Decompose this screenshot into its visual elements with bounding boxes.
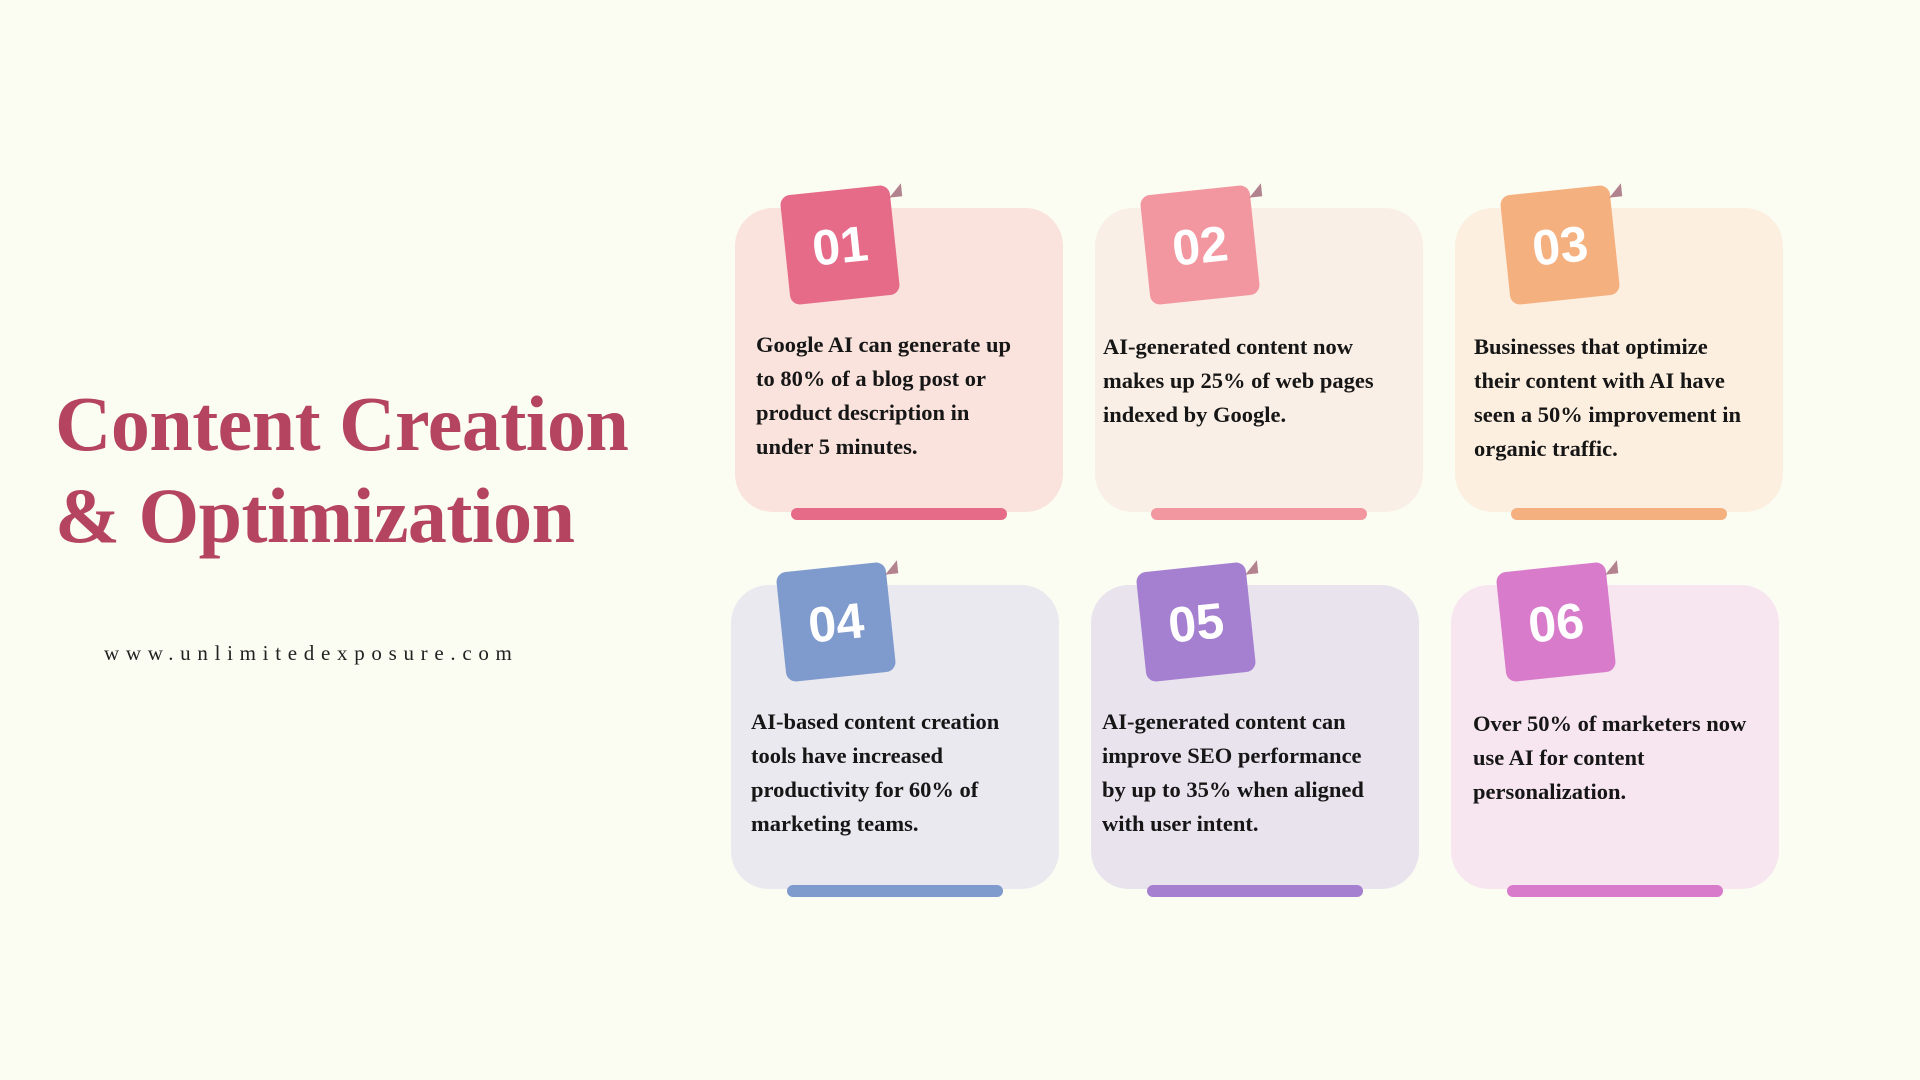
bar 01 xyxy=(791,508,1007,520)
text 03: seen a 50% improvement in xyxy=(1474,402,1741,427)
bar 04 xyxy=(787,885,1003,897)
badge 02 xyxy=(1140,185,1260,305)
bar 06 xyxy=(1507,885,1723,897)
badge 03 xyxy=(1500,185,1620,305)
title: Content Creation xyxy=(55,380,628,467)
text 05: AI-generated content can xyxy=(1102,709,1346,734)
text 01: under 5 minutes. xyxy=(756,434,918,459)
card 06 xyxy=(1451,585,1779,889)
card 03 xyxy=(1455,208,1783,512)
text 01: to 80% of a blog post or xyxy=(756,366,986,391)
badge 04: 04 xyxy=(806,592,867,654)
text 02: AI-generated content now xyxy=(1103,334,1353,359)
text 01: product description in xyxy=(756,400,969,425)
text 03 xyxy=(1474,334,1741,461)
text 04: AI-based content creation xyxy=(751,709,999,734)
badge 05 xyxy=(1136,562,1256,682)
badge 01: 01 xyxy=(810,215,871,277)
text 04 xyxy=(751,709,999,836)
text 01: Google AI can generate up xyxy=(756,332,1011,357)
text 05: by up to 35% when aligned xyxy=(1102,777,1364,802)
title: & Optimization xyxy=(55,472,574,559)
bar 05 xyxy=(1147,885,1363,897)
text 02: indexed by Google. xyxy=(1103,402,1286,427)
text 03: organic traffic. xyxy=(1474,436,1618,461)
text 04: marketing teams. xyxy=(751,811,918,836)
text 04: tools have increased xyxy=(751,743,943,768)
bar 02 xyxy=(1151,508,1367,520)
badge 02: 02 xyxy=(1170,215,1231,277)
text 06: personalization. xyxy=(1473,779,1626,804)
title xyxy=(55,380,628,559)
text 02: makes up 25% of web pages xyxy=(1103,368,1374,393)
text 06: use AI for content xyxy=(1473,745,1644,770)
text 05: improve SEO performance xyxy=(1102,743,1362,768)
card 02 xyxy=(1095,208,1423,512)
text 03: Businesses that optimize xyxy=(1474,334,1708,359)
text 06 xyxy=(1473,711,1746,804)
text 05: with user intent. xyxy=(1102,811,1258,836)
bar 03 xyxy=(1511,508,1727,520)
badge 06 xyxy=(1496,562,1616,682)
text 06: Over 50% of marketers now xyxy=(1473,711,1746,736)
url: www.unlimitedexposure.com xyxy=(104,641,519,665)
badge 04 xyxy=(776,562,896,682)
text 02 xyxy=(1103,334,1374,427)
text 01 xyxy=(756,332,1011,459)
badge 05: 05 xyxy=(1166,592,1227,654)
text 05 xyxy=(1102,709,1364,836)
card 05 xyxy=(1091,585,1419,889)
card 04 xyxy=(731,585,1059,889)
text 04: productivity for 60% of xyxy=(751,777,978,802)
badge 03: 03 xyxy=(1530,215,1591,277)
badge 06: 06 xyxy=(1526,592,1587,654)
badge 01 xyxy=(780,185,900,305)
card 01 xyxy=(735,208,1063,512)
text 03: their content with AI have xyxy=(1474,368,1725,393)
